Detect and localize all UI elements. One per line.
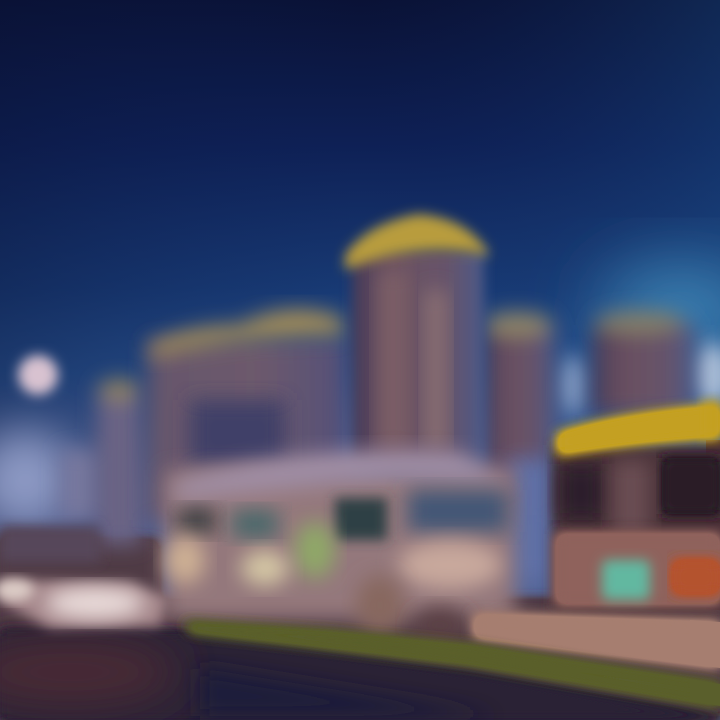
building: central tower with gold dome bbox=[345, 214, 490, 465]
ground: pink terrace bbox=[474, 614, 720, 668]
building: left mid-rise block bbox=[148, 309, 346, 520]
building: low pink pavilion bbox=[165, 450, 515, 643]
building: far left tower bbox=[62, 379, 141, 545]
ground: dark road and forecourt bbox=[0, 630, 720, 720]
vehicle: white glowing car bbox=[0, 526, 168, 628]
icon: glowing moon bbox=[18, 355, 58, 395]
ground: warm base behind the buildings bbox=[0, 535, 720, 720]
ground: green lawn strip bbox=[185, 622, 720, 706]
building: far right tower bbox=[592, 311, 696, 415]
building: right tower bbox=[484, 312, 556, 580]
building: right pavilion with yellow roof bbox=[552, 402, 720, 615]
